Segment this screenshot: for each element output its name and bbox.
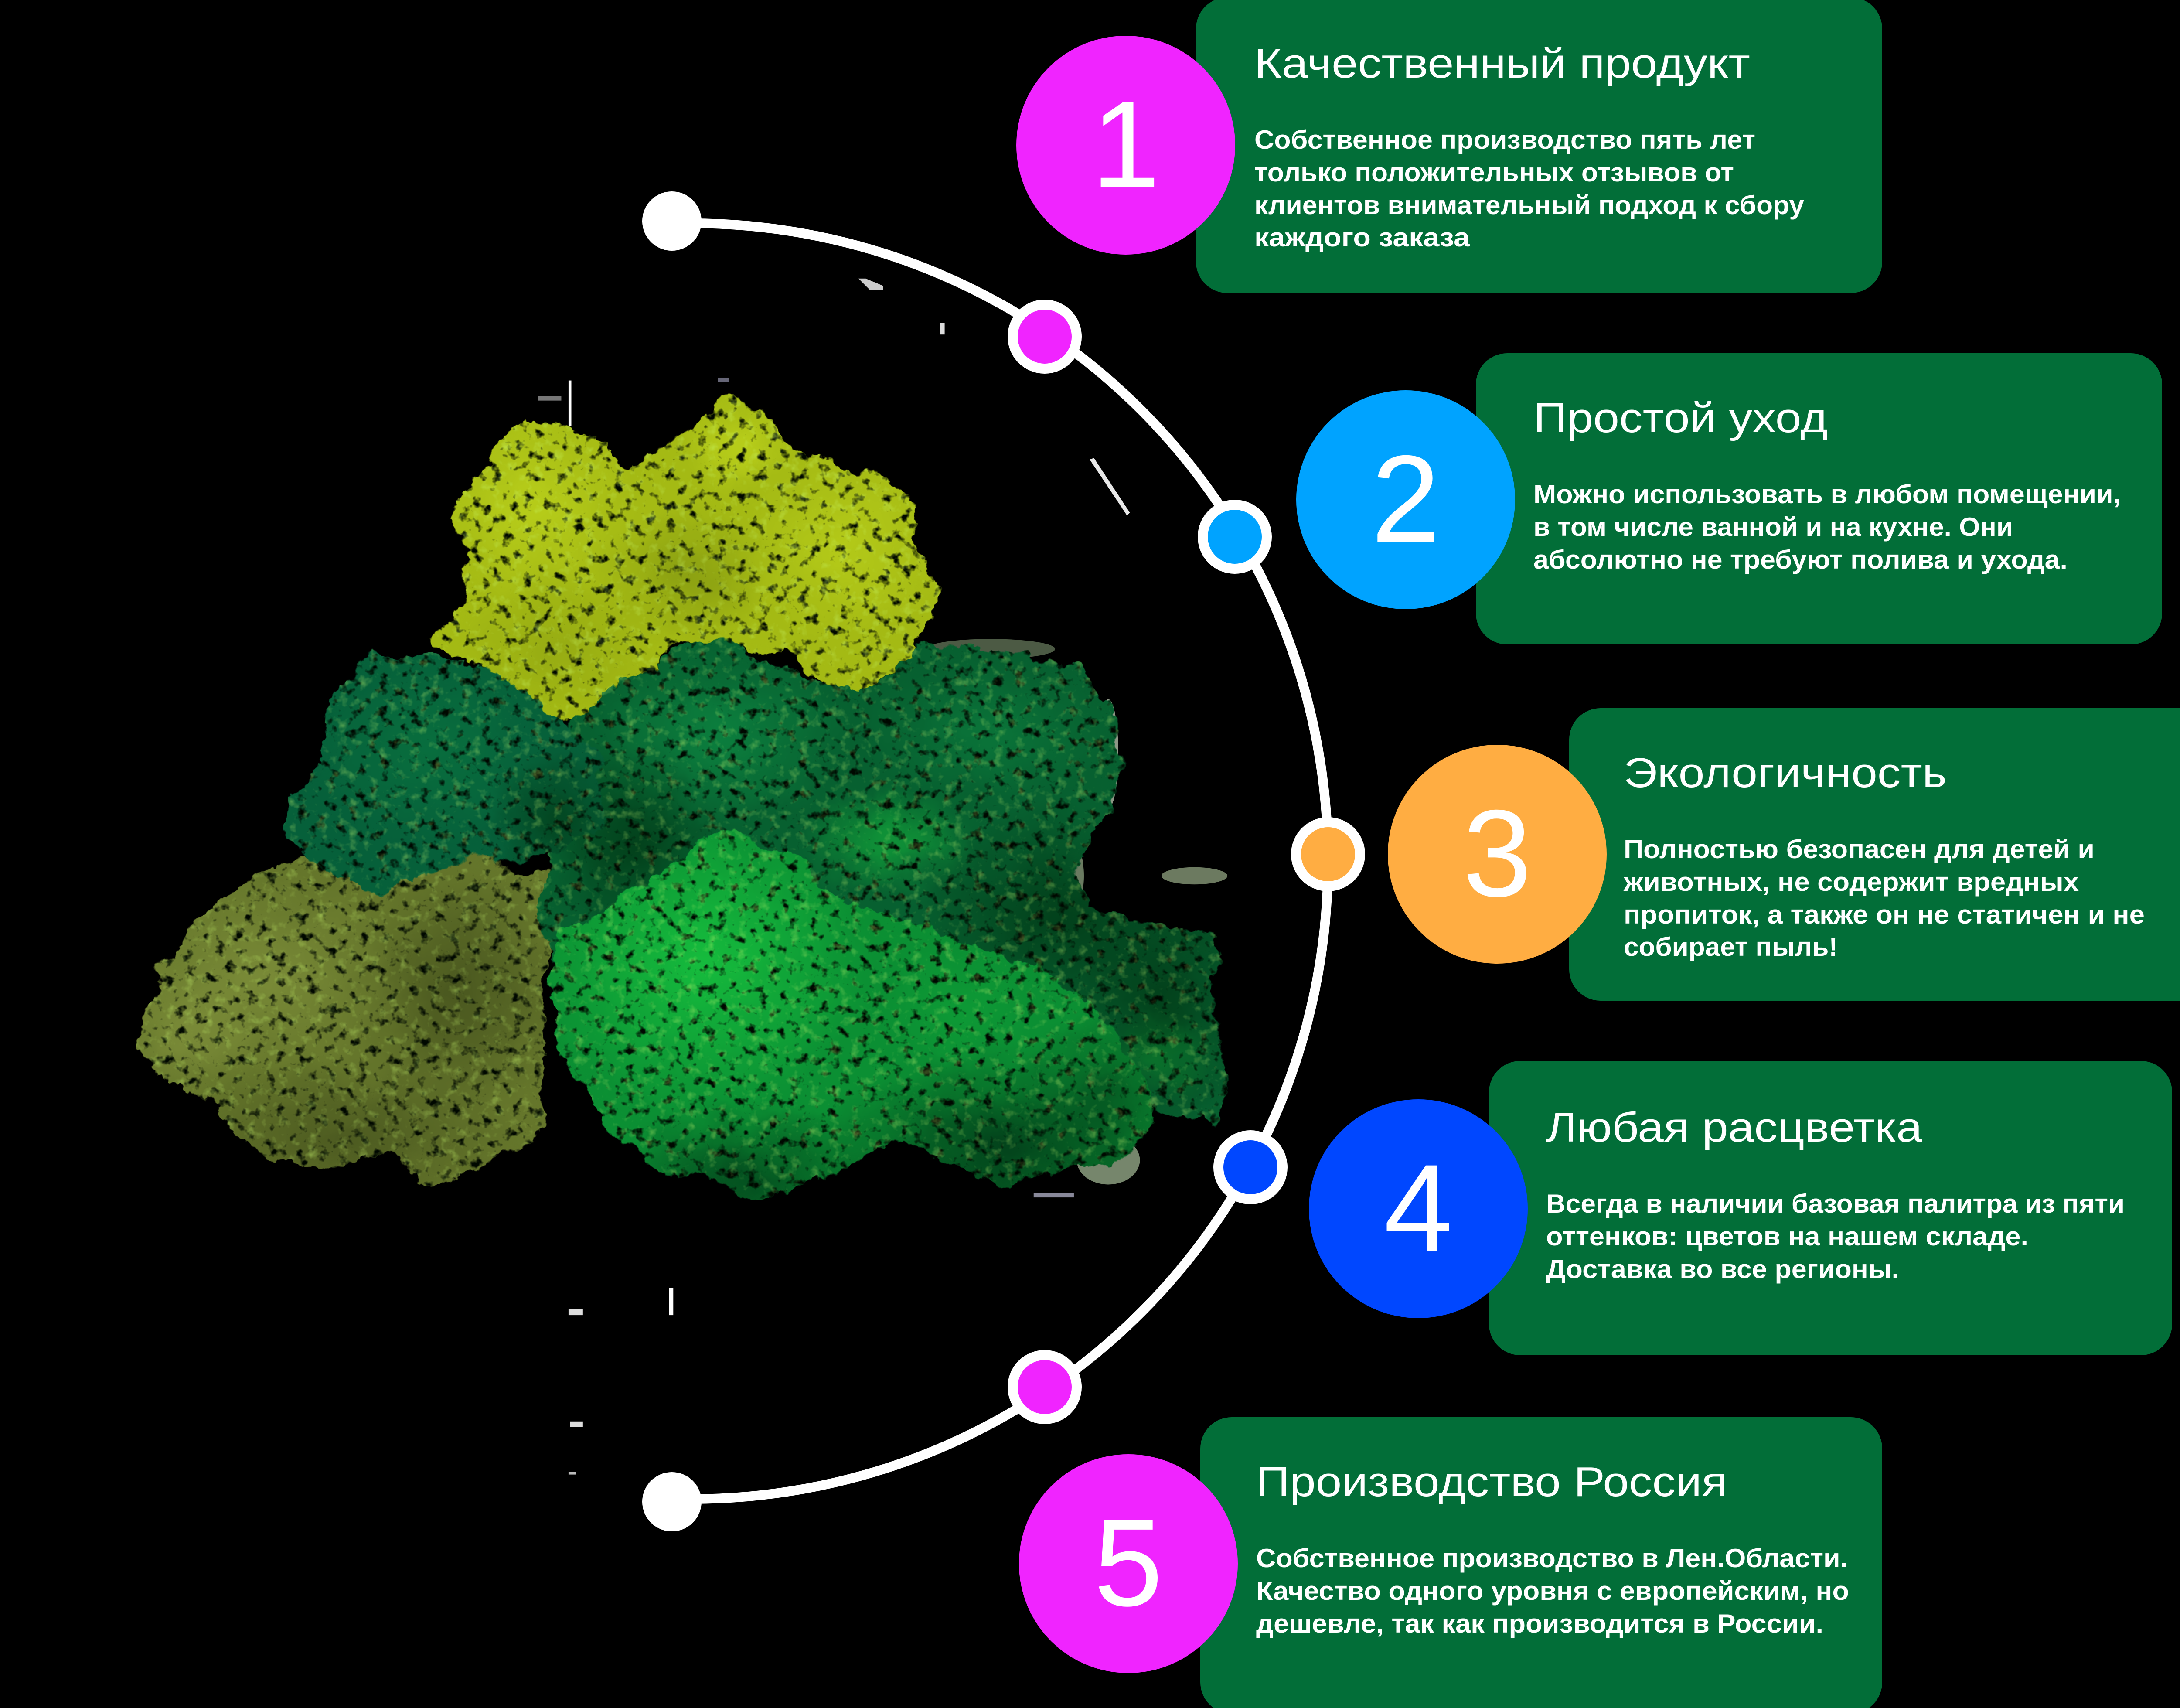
body text 5: дешевле, так как производится в России. (1256, 1609, 1823, 1638)
moss illustration (115, 279, 1264, 1475)
number badge 3 (1388, 745, 1607, 964)
body text 2: Можно использовать в любом помещении, (1533, 480, 2121, 509)
body text 2: абсолютно не требуют полива и ухода. (1533, 545, 2068, 574)
panel 2: easy care (1296, 353, 2162, 644)
number badge 1 (1016, 36, 1235, 255)
panel 3: eco friendly (1388, 708, 2180, 1001)
body text 4 (1546, 1189, 2125, 1284)
body text 4: Всегда в наличии базовая палитра из пяти (1546, 1189, 2125, 1218)
body text 1: каждого заказа (1254, 223, 1470, 252)
body text 4: Доставка во все регионы. (1546, 1255, 1899, 1284)
body text 1: клиентов внимательный подход к сбору (1254, 191, 1805, 220)
moss clump: bright green (531, 811, 1192, 1249)
panel 5: made in Russia (1019, 1417, 1882, 1708)
body text 5: Качество одного уровня с европейским, но (1256, 1576, 1849, 1606)
body text 5 (1256, 1544, 1849, 1638)
number badge 2 (1296, 390, 1515, 609)
heading 4: Любая расцветка (1546, 1104, 1923, 1151)
body text 3: Полностью безопасен для детей и (1624, 835, 2095, 864)
body text 3: животных, не содержит вредных (1623, 867, 2079, 897)
number badge 3: 3 (1463, 784, 1532, 923)
moss clump: mid green (531, 617, 1264, 1163)
number badge 5: 5 (1094, 1494, 1163, 1632)
timeline node 5 (1008, 1350, 1082, 1424)
heading 2: Простой уход (1533, 395, 1828, 441)
body text 4: оттенков: цветов на нашем складе. (1546, 1222, 2028, 1251)
body text 1 (1254, 125, 1805, 252)
moss clump: yellow (402, 373, 962, 761)
panel 4: any colour (1309, 1061, 2172, 1355)
number badge 2: 2 (1371, 430, 1440, 568)
panel 1: quality product (1016, 0, 1882, 293)
number badge 5 (1019, 1454, 1238, 1673)
timeline end dot (642, 1472, 702, 1531)
body text 1: только положительных отзывов от (1254, 158, 1734, 187)
heading 3: Экологичность (1624, 750, 1947, 796)
timeline node 1 (1008, 300, 1082, 374)
body text 5: Собственное производство в Лен.Области. (1256, 1544, 1848, 1573)
body text 1: Собственное производство пять лет (1254, 125, 1755, 154)
moss clump: dark green (259, 632, 632, 919)
heading 1: Качественный продукт (1254, 40, 1750, 87)
number badge 4: 4 (1384, 1139, 1453, 1277)
timeline node 2 (1198, 500, 1272, 574)
timeline start dot (642, 191, 702, 251)
timeline arc (672, 221, 1328, 1502)
timeline node 3 (1291, 817, 1365, 891)
number badge 1: 1 (1091, 75, 1160, 214)
timeline node 4 (1213, 1130, 1288, 1204)
heading 5: Производство Россия (1256, 1459, 1727, 1505)
moss stray fragments (538, 279, 1227, 1475)
body text 3: собирает пыль! (1624, 932, 1838, 961)
number badge 4 (1309, 1099, 1528, 1318)
moss clump: olive (115, 833, 589, 1206)
body text 2: в том числе ванной и на кухне. Они (1533, 512, 2013, 542)
body text 3 (1623, 835, 2145, 961)
body text 3: пропиток, а также он не статичен и не (1624, 900, 2145, 929)
body text 2 (1533, 480, 2121, 574)
